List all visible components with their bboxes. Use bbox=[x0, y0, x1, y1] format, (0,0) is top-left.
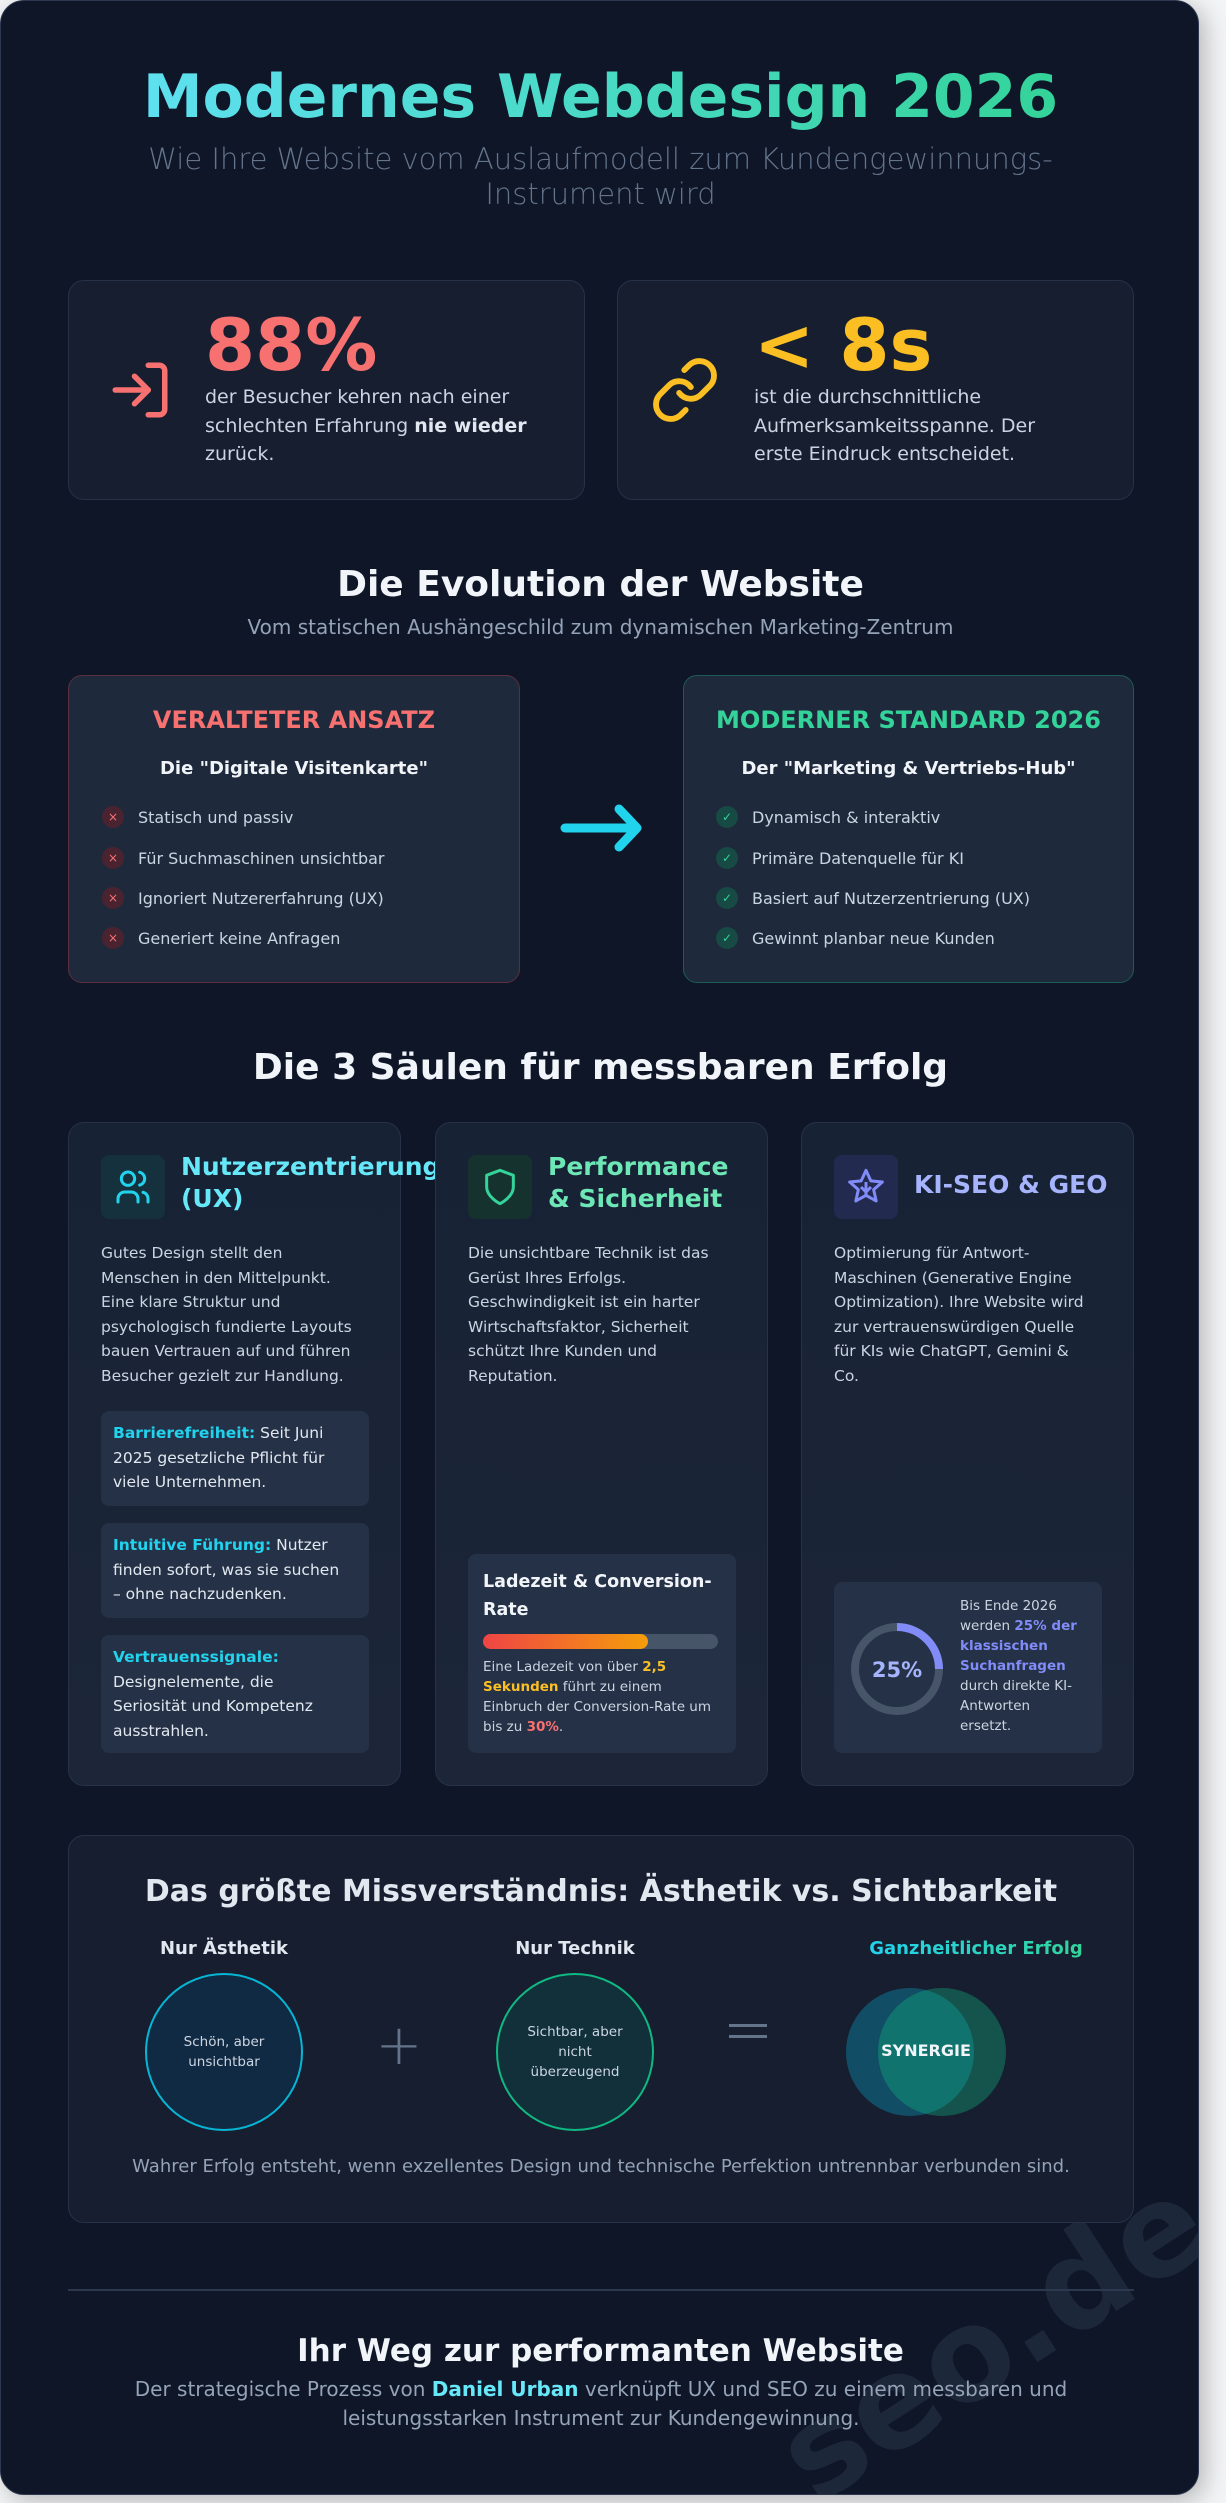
pillar title: KI-SEO & GEO bbox=[914, 1170, 1107, 1199]
list bbox=[102, 806, 384, 949]
list: × bbox=[108, 931, 118, 945]
circle: aesthetics bbox=[145, 1973, 303, 2131]
circle: technique: Sichtbar, aber nicht überzeugend bbox=[527, 2024, 623, 2080]
icon: shield bbox=[468, 1155, 532, 1219]
arrow bbox=[560, 804, 642, 852]
panel: misunderstanding bbox=[68, 1835, 1134, 2223]
stat text: ist die durchschnittliche Aufmerksamkeitsspanne. Der erste Eindruck entscheidet. bbox=[754, 386, 1035, 465]
label: Ganzheitlicher Erfolg: Ganzheitlicher Erfolg bbox=[869, 1938, 1083, 1959]
pillar title: Nutzerzentrierung (UX) bbox=[181, 1152, 440, 1213]
chart: 25% ring: Bis Ende 2026 werden 25% der klassischen Suchanfragen durch direkte KI-Antworten ersetzt. bbox=[960, 1598, 1077, 1734]
subtitle: Wie Ihre Website vom Auslaufmodell zum Kundengewinnungs-Instrument wird bbox=[148, 142, 1053, 211]
label: Nur Technik: Nur Technik bbox=[515, 1938, 635, 1959]
list: Generiert keine Anfragen bbox=[138, 928, 340, 948]
panel: pillar performance bbox=[435, 1122, 768, 1786]
list: ✓ bbox=[722, 931, 732, 945]
callout: Intuitive Führung bbox=[101, 1523, 369, 1618]
pillar text: Optimierung für Antwort-Maschinen (Generative Engine Optimization). Ihre Website wird zur vertrauenswürdigen Quelle für KIs wie ChatGPT, Gemini & Co. bbox=[834, 1244, 1084, 1385]
callout: Barrierefreiheit: Barrierefreiheit: Seit Juni 2025 gesetzliche Pflicht für viele Unternehmen. bbox=[113, 1424, 324, 1491]
icon: link bbox=[653, 358, 717, 422]
chart: 25% ring bbox=[834, 1582, 1102, 1753]
list: Ignoriert Nutzererfahrung (UX) bbox=[138, 888, 384, 908]
pillar text: Gutes Design stellt den Menschen in den Mittelpunkt. Eine klare Struktur und psychologisch fundierte Layouts bauen Vertrauen auf und führen Besucher gezielt zur Handlung. bbox=[101, 1244, 352, 1385]
stat text: der Besucher kehren nach einer schlechten Erfahrung nie wieder zurück. bbox=[205, 386, 527, 465]
label: Nur Ästhetik: Nur Ästhetik bbox=[160, 1938, 288, 1959]
list: Gewinnt planbar neue Kunden bbox=[752, 928, 995, 948]
list bbox=[716, 806, 1030, 949]
panel: old approach bbox=[68, 675, 520, 983]
caption: Wahrer Erfolg entsteht, wenn exzellentes Design und technische Perfektion untrennbar verbunden sind. bbox=[132, 2156, 1070, 2177]
subheading: evolution: Vom statischen Aushängeschild zum dynamischen Marketing-Zentrum bbox=[248, 615, 953, 639]
subheading: Die "Digitale Visitenkarte" bbox=[160, 758, 428, 779]
venn: synergy bbox=[846, 1988, 1006, 2116]
title: Modernes Webdesign 2026 bbox=[143, 62, 1058, 132]
panel: pillar KI-SEO bbox=[801, 1122, 1134, 1786]
pillar title: Performance & Sicherheit bbox=[548, 1152, 728, 1213]
list: Statisch und passiv bbox=[138, 808, 293, 826]
callout: Intuitive Führung: Intuitive Führung: Nutzer finden sofort, was sie suchen – ohne nachzudenken. bbox=[113, 1536, 339, 1603]
callout: Vertrauenssignale: Vertrauenssignale: Designelemente, die Seriosität und Kompetenz ausstrahlen. bbox=[113, 1648, 313, 1740]
panel: pillar UX bbox=[68, 1122, 401, 1786]
icon: equals bbox=[729, 2024, 767, 2038]
stat number: 88% bbox=[205, 303, 377, 387]
list: Basiert auf Nutzerzentrierung (UX) bbox=[752, 888, 1030, 908]
list: × bbox=[108, 891, 118, 905]
circle: technique bbox=[496, 1973, 654, 2131]
list: × bbox=[108, 851, 118, 865]
heading: VERALTETER ANSATZ bbox=[153, 706, 435, 734]
footer text: Der strategische Prozess von Daniel Urban verknüpft UX und SEO zu einem messbaren und leistungsstarken Instrument zur Kundengewinnung. bbox=[135, 2377, 1067, 2430]
list: × bbox=[108, 810, 118, 824]
icon: login arrow bbox=[112, 362, 168, 418]
heading: MODERNER STANDARD 2026 bbox=[716, 706, 1101, 734]
heading: Das größte Missverständnis: Ästhetik vs. Sichtbarkeit bbox=[145, 1874, 1057, 1909]
heading: pillars: Die 3 Säulen für messbaren Erfolg bbox=[253, 1047, 948, 1088]
panel: modern standard bbox=[683, 675, 1134, 983]
circle: aesthetics: Schön, aber bbox=[184, 2034, 264, 2050]
chart: load time bar: Eine Ladezeit von über 2,5 Sekunden führt zu einem Einbruch der Conversion-Rate um bis zu 30%. bbox=[483, 1659, 711, 1735]
panel: stat 88% bbox=[68, 280, 585, 500]
list: Dynamisch & interaktiv bbox=[752, 808, 940, 826]
callout: Vertrauenssignale bbox=[101, 1635, 369, 1753]
heading: evolution: Die Evolution der Website bbox=[337, 564, 864, 605]
icon: plus: + bbox=[376, 2013, 422, 2078]
list: ✓ bbox=[722, 891, 732, 905]
list: ✓ bbox=[722, 810, 732, 824]
icon: sparkle star bbox=[834, 1155, 898, 1219]
circle: aesthetics: unsichtbar bbox=[188, 2054, 260, 2070]
icon: users bbox=[101, 1155, 165, 1219]
chart: load time bar: Ladezeit & Conversion-Rate bbox=[483, 1572, 712, 1620]
list: Primäre Datenquelle für KI bbox=[752, 848, 964, 868]
stat number: < 8s bbox=[754, 303, 932, 387]
pillar text: Die unsichtbare Technik ist das Gerüst Ihres Erfolgs. Geschwindigkeit ist ein harter Wirtschaftsfaktor, Sicherheit schützt Ihre Kunden und Reputation. bbox=[468, 1244, 709, 1385]
chart: 25% ring: 25% bbox=[872, 1658, 922, 1682]
subheading: Der "Marketing & Vertriebs-Hub" bbox=[741, 758, 1076, 779]
list: Für Suchmaschinen unsichtbar bbox=[138, 848, 384, 868]
chart: load time bar bbox=[468, 1554, 736, 1753]
venn: synergy: SYNERGIE bbox=[881, 2041, 971, 2060]
panel: stat 8s bbox=[617, 280, 1134, 500]
heading: footer: Ihr Weg zur performanten Website bbox=[297, 2333, 904, 2369]
list: ✓ bbox=[722, 851, 732, 865]
callout: Barrierefreiheit bbox=[101, 1411, 369, 1506]
